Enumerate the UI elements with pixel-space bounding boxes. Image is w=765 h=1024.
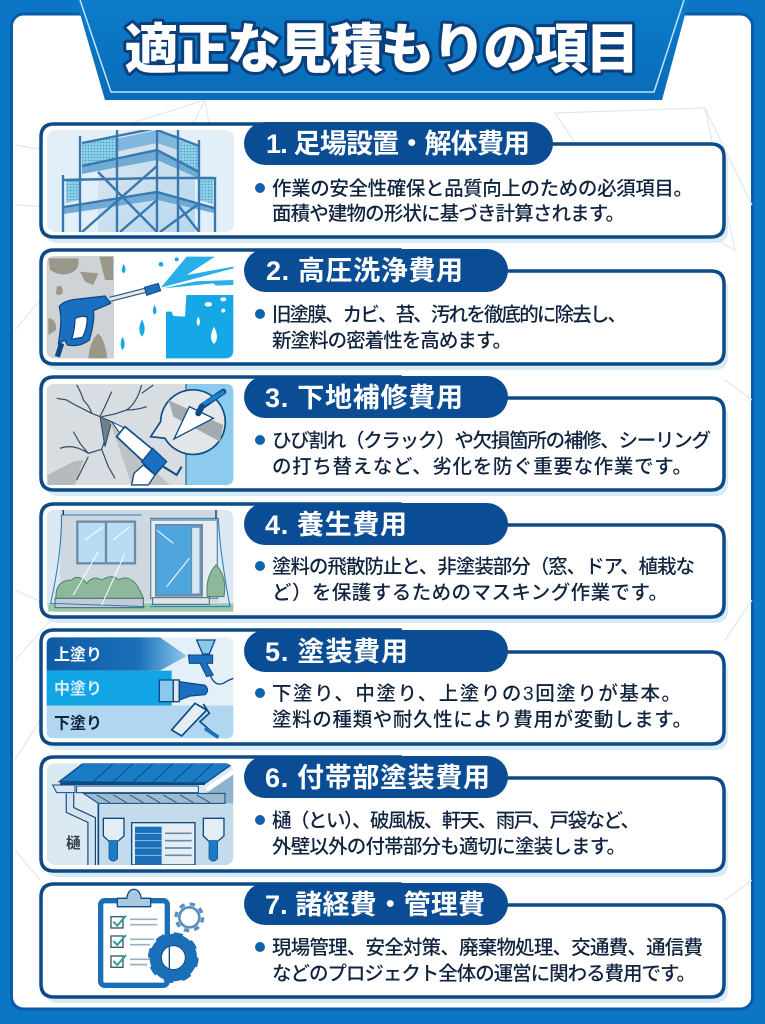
heading pill 2: 2. 高圧洗浄費用 — [266, 256, 463, 286]
icon: paint layers: 中塗り — [54, 680, 102, 698]
icon: eaves and gutter — [47, 763, 233, 865]
heading pill 7 — [244, 883, 508, 925]
heading pill 6: 6. 付帯部塗装費用 — [265, 763, 490, 793]
heading pill 3: 3. 下地補修費用 — [265, 383, 463, 413]
icon: masking net — [47, 510, 233, 612]
text block 5: 塗料の種類や耐久性により費用が変動します。 — [272, 709, 692, 731]
text block 6 — [255, 810, 640, 858]
text block 4: ど）を保護するためのマスキング作業です。 — [272, 582, 668, 604]
heading pill 4: 4. 養生費用 — [265, 510, 407, 540]
text block 7 — [255, 937, 703, 985]
text block 3: ひび割れ（クラック）や欠損箇所の補修、シーリング — [272, 429, 711, 452]
text block 1: 面積や建物の形状に基づき計算されます。 — [272, 203, 625, 225]
text block 4 — [255, 556, 695, 604]
title: 適正な見積もりの項目 — [124, 20, 640, 80]
panel: 1 scaffolding — [41, 122, 728, 243]
heading pill 7: 7. 諸経費・管理費 — [265, 890, 485, 920]
panel: 6 accessory painting — [41, 756, 728, 877]
heading pill 6 — [244, 756, 508, 798]
panel: 7 overhead — [41, 883, 728, 1003]
heading pill 5 — [244, 630, 508, 672]
icon: eaves and gutter: 樋 — [66, 835, 81, 852]
panel: 2 pressure washing — [41, 249, 728, 370]
title banner — [76, 0, 689, 100]
heading pill 3 — [244, 376, 508, 418]
panel: 5 painting — [41, 630, 728, 750]
text block 4: 塗料の飛散防止と、非塗装部分（窓、ドア、植栽な — [272, 556, 695, 578]
text block 2: 新塗料の密着性を高めます。 — [272, 330, 512, 352]
text block 5 — [255, 683, 692, 731]
text block 2 — [255, 304, 627, 352]
text block 6: 樋（とい）、破風板、軒天、雨戸、戸袋など、 — [272, 810, 640, 832]
icon: paint layers: 下塗り — [54, 715, 102, 733]
text block 5: 下塗り、中塗り、上塗りの3回塗りが基本。 — [272, 683, 681, 705]
icon: paint layers — [47, 637, 233, 738]
text block 7: などのプロジェクト全体の運営に関わる費用です。 — [272, 963, 696, 985]
icon: scaffolding — [47, 128, 234, 232]
text block 1: 作業の安全性確保と品質向上のための必須項目。 — [272, 178, 693, 200]
heading pill 1 — [244, 122, 553, 165]
text block 3 — [255, 429, 711, 478]
heading pill 5: 5. 塗装費用 — [265, 637, 408, 667]
text block 6: 外壁以外の付帯部分も適切に塗装します。 — [272, 836, 626, 858]
icon: paint layers: 上塗り — [54, 646, 102, 664]
panel: 4 masking — [41, 503, 728, 623]
icon: clipboard and gears — [101, 889, 203, 985]
icon: crack repair — [47, 384, 233, 485]
panel: 3 substrate repair — [41, 376, 728, 496]
text block 7: 現場管理、安全対策、廃棄物処理、交通費、通信費 — [272, 937, 703, 959]
text block 2: 旧塗膜、カビ、苔、汚れを徹底的に除去し、 — [272, 304, 627, 326]
icon: pressure washer — [47, 256, 233, 358]
heading pill 1: 1. 足場設置・解体費用 — [266, 129, 530, 159]
text block 3: の打ち替えなど、劣化を防ぐ重要な作業です。 — [272, 456, 692, 478]
heading pill 4 — [244, 503, 508, 545]
text block 1 — [255, 178, 693, 225]
heading pill 2 — [244, 249, 508, 292]
